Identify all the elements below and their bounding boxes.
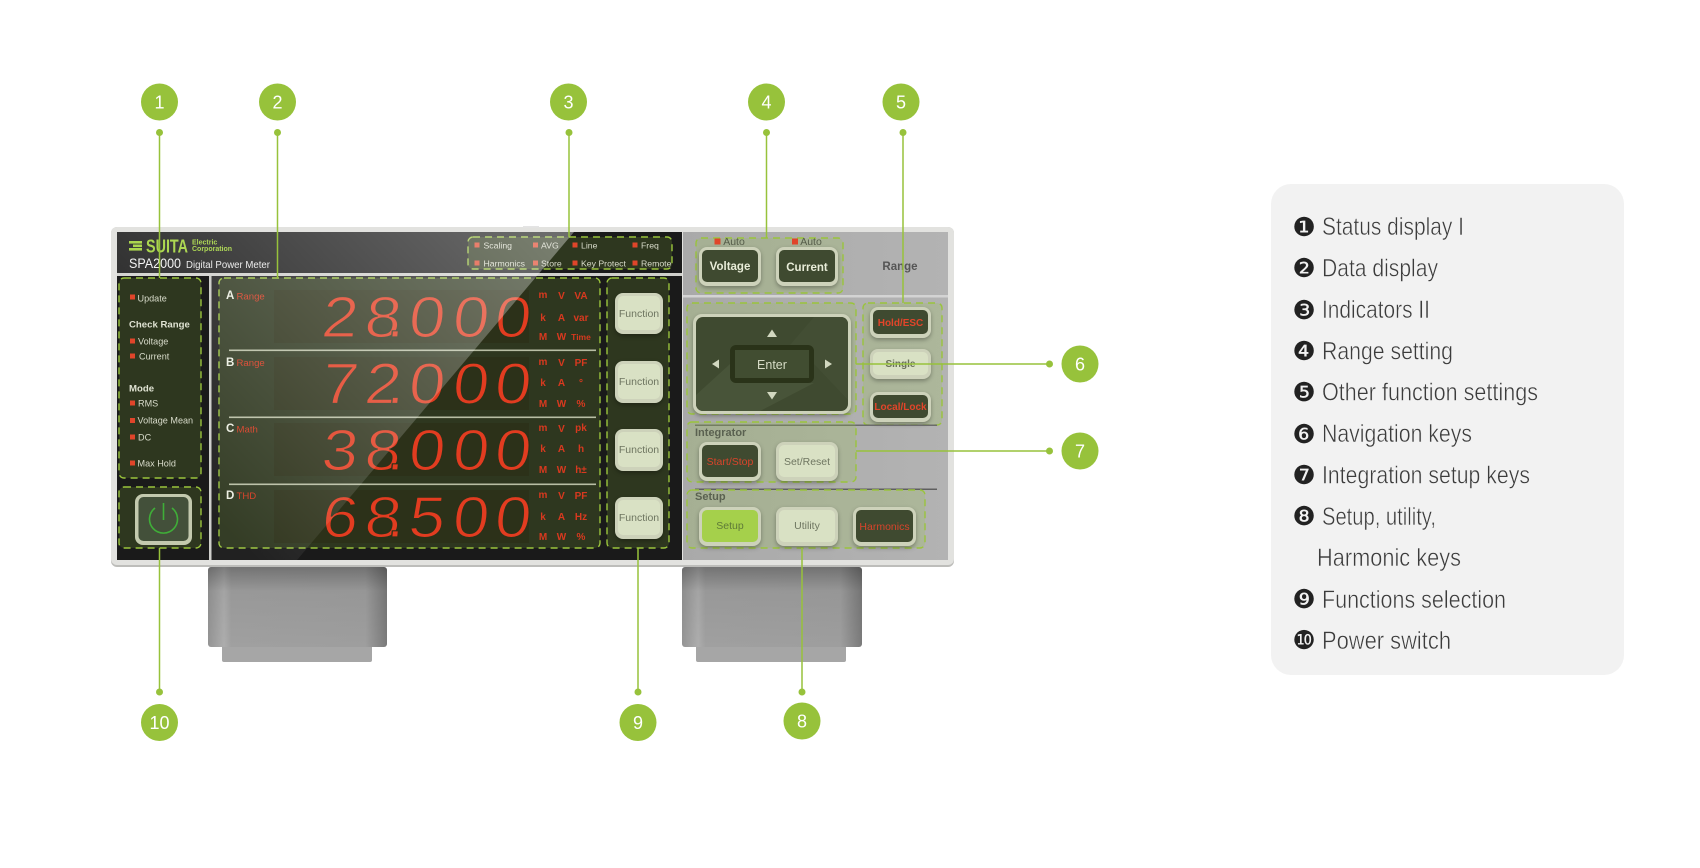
brand logo: Digital Power Meter <box>186 260 271 271</box>
brand logo: SUITA <box>146 236 188 256</box>
panel: setup keys: Setup <box>716 520 744 532</box>
channel labels: D <box>226 490 234 502</box>
legend item 6: ❻ <box>1292 420 1316 450</box>
legend item 7: ❼ <box>1292 461 1316 491</box>
panel: setup keys: Utility <box>794 520 821 532</box>
legend item 8 <box>1292 502 1461 572</box>
callout 4: 4 <box>761 92 772 112</box>
channel labels: Range <box>236 358 265 369</box>
reading A: 28.000 <box>319 285 535 350</box>
reading B: 72.000 <box>319 352 535 417</box>
legend item 8: Setup, utility, <box>1322 503 1436 531</box>
unit labels: k <box>540 512 546 523</box>
legend item 10: Power switch <box>1322 627 1451 655</box>
legend item 2 <box>1292 254 1438 284</box>
panel: integrator keys: Integrator <box>695 427 747 439</box>
channel labels <box>226 290 265 502</box>
callout 7 <box>856 432 1098 470</box>
callout 4 <box>748 84 785 238</box>
legend item 2: Data display <box>1322 254 1438 282</box>
brand logo: Electric <box>192 240 217 246</box>
legend item 5: Other function settings <box>1322 378 1538 406</box>
callout 3: 3 <box>563 92 574 112</box>
channel labels: B <box>226 357 234 369</box>
panel: indicators II <box>468 237 672 269</box>
unit labels: M <box>539 532 547 543</box>
panel: other function settings: Single <box>885 359 916 370</box>
callout 5 <box>882 84 920 303</box>
panel: range setting <box>696 236 918 293</box>
legend item 1: Status display I <box>1322 213 1464 241</box>
panel: function keys: Function <box>619 308 659 320</box>
callout 10 <box>141 548 178 741</box>
panel: indicators II: Remote <box>641 258 672 268</box>
brand logo: SPA2000 <box>129 255 181 271</box>
panel: status display: Current <box>139 352 170 362</box>
callout 1: 1 <box>154 92 165 112</box>
channel labels: A <box>226 290 234 302</box>
unit labels: V <box>558 358 565 369</box>
unit labels: k <box>540 444 546 455</box>
panel: other function settings <box>863 303 942 425</box>
brand logo <box>129 236 271 271</box>
panel: status display: Check Range <box>129 320 190 330</box>
channel labels: C <box>226 423 234 435</box>
panel: indicators II: Store <box>541 258 562 268</box>
legend item 8: ❽ <box>1292 502 1316 532</box>
unit labels: A <box>558 444 565 455</box>
panel: indicators II: Scaling <box>484 240 512 250</box>
unit labels: A <box>558 378 565 389</box>
panel: setup keys: Setup <box>695 491 726 503</box>
legend item 3: ❸ <box>1292 296 1316 326</box>
panel: status display: Voltage Mean <box>138 416 193 426</box>
unit labels: ° <box>579 378 583 389</box>
unit labels: m <box>539 423 548 434</box>
legend item 4: Range setting <box>1322 338 1453 366</box>
glare over the display <box>117 232 574 560</box>
callout 8 <box>784 548 820 740</box>
unit labels: k <box>540 378 546 389</box>
legend item 5: ❺ <box>1292 378 1316 408</box>
unit labels: PF <box>575 491 587 502</box>
infographic canvas <box>111 84 1624 741</box>
panel: navigation keys: Enter <box>757 358 787 372</box>
callout 6 <box>856 346 1098 382</box>
icon: navigation arrows <box>712 330 832 400</box>
callout 9: 9 <box>633 713 643 733</box>
legend item 10 <box>1292 626 1451 656</box>
callout 7: 7 <box>1075 442 1085 462</box>
legend item 4 <box>1292 337 1453 367</box>
panel: range setting: Range <box>882 261 918 273</box>
unit labels: A <box>558 512 565 523</box>
unit labels: V <box>558 424 565 435</box>
unit labels: W <box>557 332 567 343</box>
legend item 10: ❿ <box>1292 626 1316 656</box>
panel: setup keys <box>687 488 937 548</box>
legend item 7: Integration setup keys <box>1322 462 1530 490</box>
panel: range setting: Current <box>786 262 828 274</box>
device body <box>111 226 954 567</box>
panel: function keys: Function <box>619 444 659 456</box>
panel: range setting: Auto <box>800 236 822 248</box>
reading C: 38.000 <box>319 418 535 483</box>
panel: other function settings: Hold/ESC <box>878 318 923 329</box>
unit labels: W <box>557 532 567 543</box>
unit labels: W <box>557 465 567 476</box>
unit labels: m <box>539 490 548 501</box>
data display row backgrounds <box>219 278 600 548</box>
reading D: 68.500 <box>319 485 535 550</box>
panel: status display: Mode <box>129 384 154 394</box>
device feet <box>208 567 862 662</box>
unit labels: h <box>578 444 584 455</box>
unit labels: % <box>577 532 586 543</box>
legend item 6 <box>1292 420 1472 450</box>
brand logo: Corporation <box>192 246 232 253</box>
panel: status display: RMS <box>138 398 158 408</box>
legend item 3 <box>1292 296 1430 326</box>
unit labels: var <box>573 313 589 324</box>
legend item 1 <box>1292 213 1464 243</box>
panel: status display: DC <box>138 432 152 442</box>
legend item 8: Harmonic keys <box>1317 544 1461 572</box>
panel: function keys: Function <box>619 512 659 524</box>
panel: legend <box>1271 184 1624 675</box>
unit labels: W <box>557 399 567 410</box>
panel: setup keys: Harmonics <box>859 521 910 533</box>
panel: indicators II: Freq <box>641 240 659 250</box>
channel labels: Math <box>236 424 258 436</box>
callout 8: 8 <box>797 712 807 732</box>
unit labels: PF <box>575 358 587 369</box>
callout 1 <box>141 84 178 278</box>
unit labels: V <box>558 491 565 502</box>
unit labels: m <box>539 290 548 301</box>
unit labels: k <box>540 313 546 324</box>
panel: integrator keys: Set/Reset <box>784 456 830 468</box>
panel: function keys: Function <box>619 376 659 388</box>
callout 2 <box>259 84 296 278</box>
legend item 9: ❾ <box>1292 585 1316 615</box>
callout 6: 6 <box>1075 354 1085 374</box>
panel: status display: Max Hold <box>138 458 176 468</box>
legend item 9: Functions selection <box>1322 586 1506 614</box>
legend item 3: Indicators II <box>1322 296 1430 324</box>
panel: status display: Update <box>138 294 167 304</box>
unit labels: h± <box>575 465 587 476</box>
panel: indicators II: Line <box>581 240 598 250</box>
panel: other function settings: Local/Lock <box>874 402 927 413</box>
unit labels: M <box>539 465 547 476</box>
callout 9 <box>620 548 656 741</box>
unit labels: pk <box>575 423 587 434</box>
callout 3 <box>550 84 587 237</box>
panel: indicators II: Key Protect <box>581 258 626 268</box>
unit labels: M <box>539 399 547 410</box>
unit labels: Hz <box>575 512 587 523</box>
panel: indicators II: AVG <box>541 240 559 250</box>
panel: status display: Voltage <box>138 336 168 346</box>
unit labels: % <box>577 399 586 410</box>
panel: range setting: Voltage <box>710 261 750 273</box>
unit labels: V <box>558 291 565 302</box>
unit labels: A <box>558 313 565 324</box>
panel: function keys <box>607 278 669 548</box>
unit labels: VA <box>574 291 588 302</box>
callout 2: 2 <box>272 92 283 112</box>
callout 5: 5 <box>896 92 906 112</box>
channel labels: THD <box>236 491 256 502</box>
callout 10: 10 <box>149 713 170 733</box>
panel: integrator keys <box>687 422 937 482</box>
unit labels: m <box>539 357 548 368</box>
unit labels: M <box>539 332 547 343</box>
panel: navigation keys <box>687 303 856 414</box>
legend item 6: Navigation keys <box>1322 420 1472 448</box>
panel: status display <box>119 278 201 478</box>
legend item 1: ❶ <box>1292 213 1316 243</box>
panel: range setting: Auto <box>723 236 745 248</box>
unit labels <box>539 290 591 543</box>
legend item 4: ❹ <box>1292 337 1316 367</box>
panel: indicators II: Harmonics <box>484 258 526 268</box>
legend item 2: ❷ <box>1292 254 1316 284</box>
channel labels: Range <box>236 292 265 302</box>
panel: integrator keys: Start/Stop <box>707 456 754 468</box>
unit labels: Time <box>571 332 591 342</box>
panel: power switch <box>119 487 201 548</box>
